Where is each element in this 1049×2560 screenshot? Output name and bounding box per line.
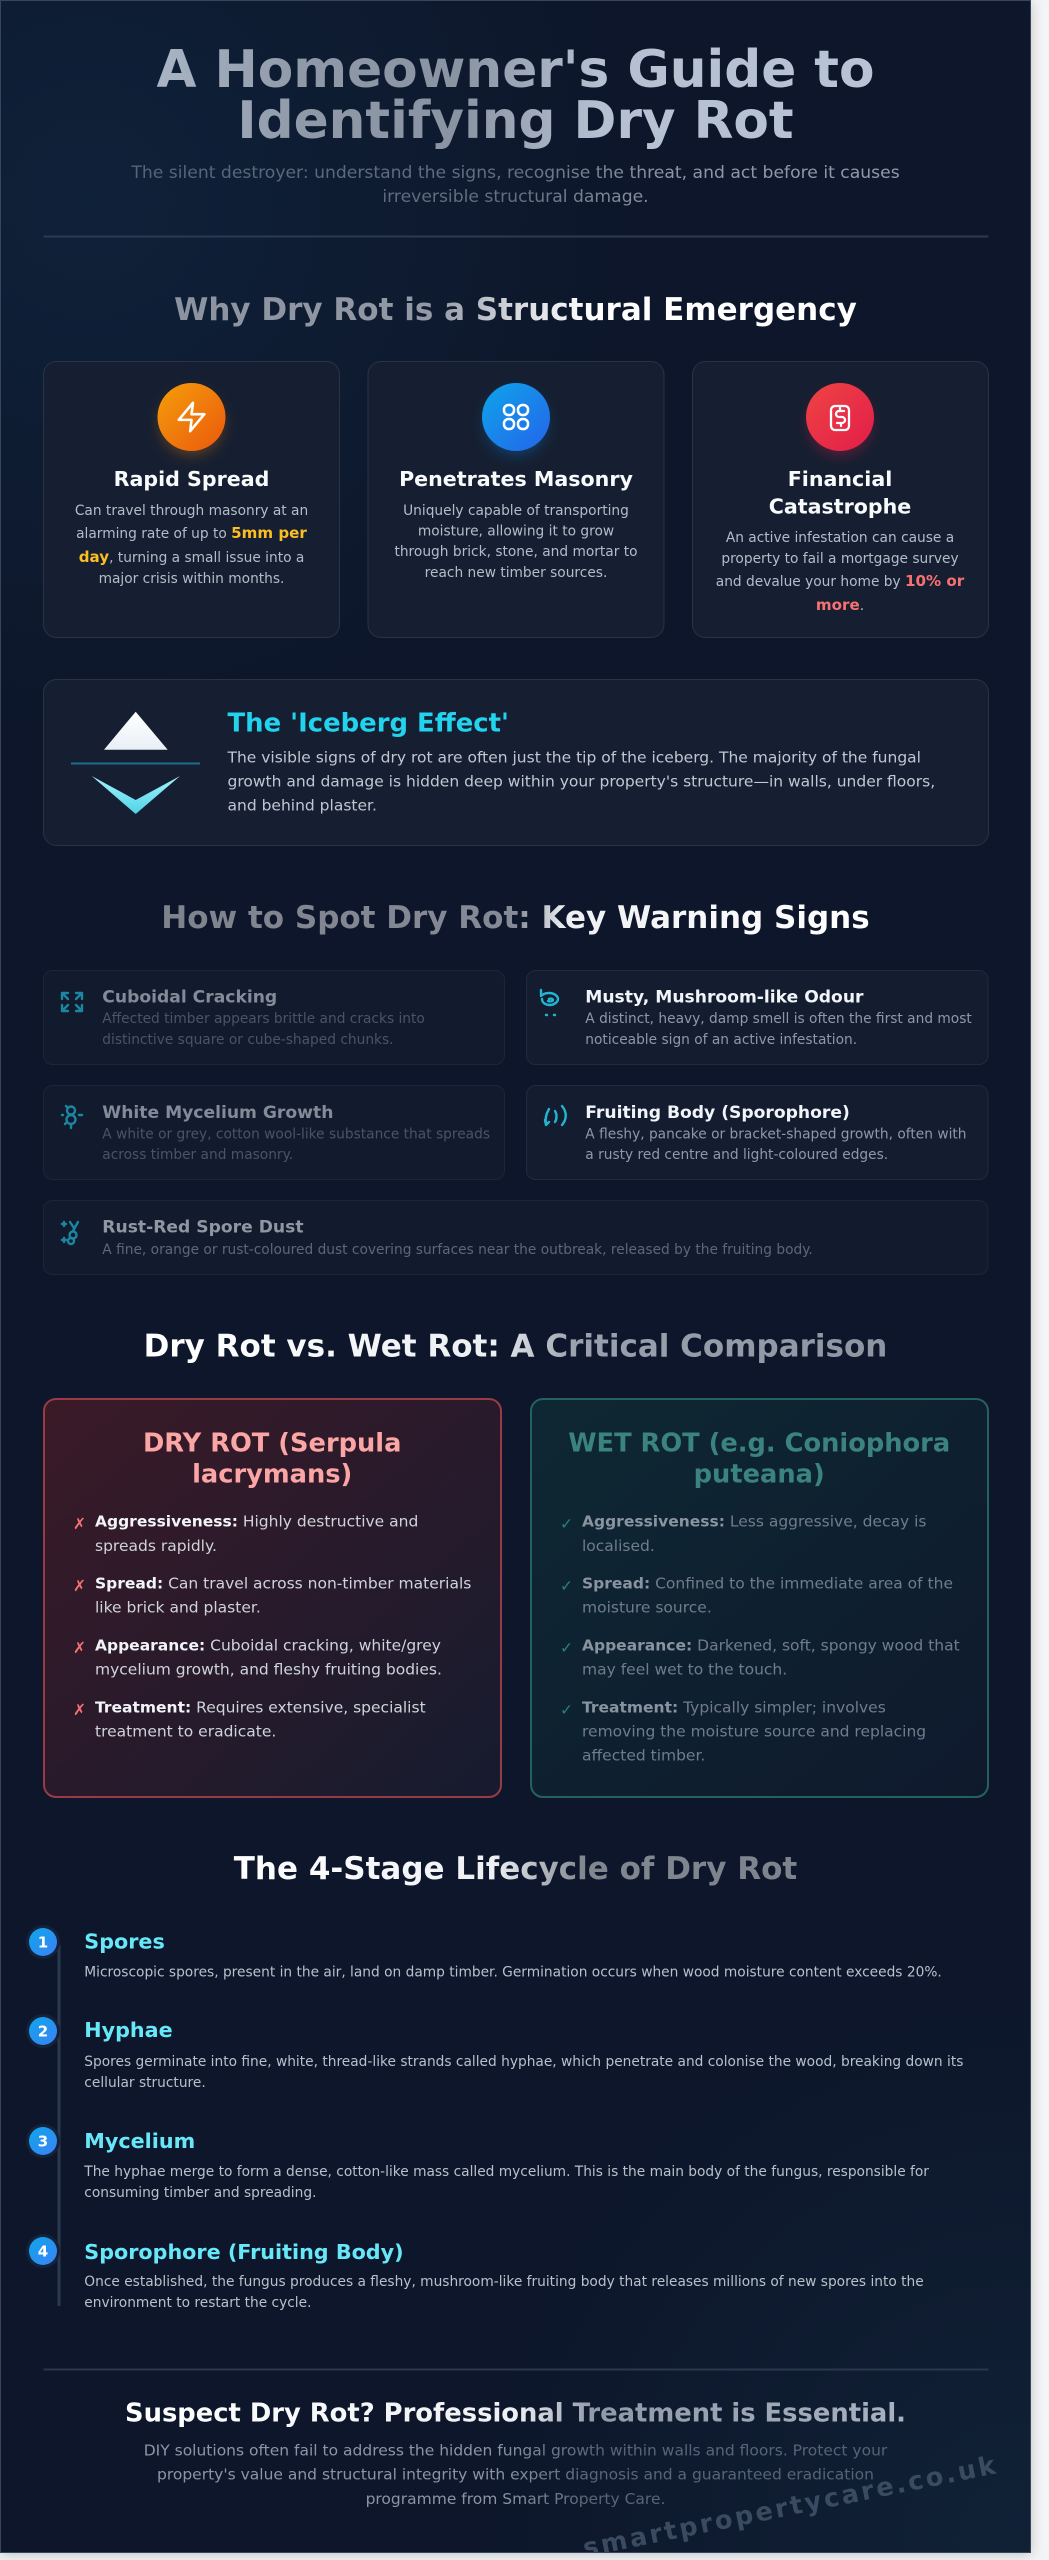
stage 4: sporophore — [26, 2234, 924, 2311]
stage 3: mycelium: consuming timber and spreading. — [84, 2185, 316, 2201]
header — [130, 40, 900, 207]
stage 4: sporophore: 4 — [38, 2242, 48, 2260]
stage 3: mycelium: The hyphae merge to form a dense, cotton-like mass called mycelium. This is the main body of the fungus, responsible for — [83, 2164, 929, 2180]
stage 4: sporophore: environment to restart the cycle. — [84, 2295, 311, 2311]
stage 3: mycelium: 3 — [38, 2132, 48, 2150]
wet rot list: ✓ — [560, 1639, 573, 1657]
wet rot list: ✓ — [560, 1701, 573, 1719]
sign text: A fine, orange or rust-coloured dust covering surfaces near the outbreak, released by the fruiting body. — [102, 1242, 813, 1258]
card text: major crisis within months. — [99, 571, 284, 587]
dry rot list: Appearance: Cuboidal cracking, white/grey — [95, 1637, 441, 1655]
icon: lightning bolt — [158, 383, 226, 455]
panel: dry rot — [44, 1399, 501, 1797]
wet rot list — [560, 1513, 960, 1765]
wet rot heading: puteana) — [694, 1459, 825, 1489]
dry rot list: ✗ — [73, 1701, 86, 1719]
sign text — [102, 1127, 490, 1163]
icon: spore dust — [62, 1222, 78, 1244]
card text: through brick, stone, and mortar to — [394, 544, 638, 560]
sign text — [585, 1127, 967, 1163]
stage 1: spores: Microscopic spores, present in the air, land on damp timber. Germination occurs when wood moisture content exceeds 20%. — [84, 1965, 942, 1981]
cta text: programme from Smart Property Care. — [366, 2490, 665, 2508]
sign text: A fleshy, pancake or bracket-shaped growth, often with — [585, 1127, 967, 1143]
title — [156, 40, 875, 151]
panel: rust-red spore dust — [44, 1200, 988, 1274]
stage 4: sporophore: Sporophore (Fruiting Body) — [84, 2240, 404, 2264]
iceberg text — [226, 749, 935, 815]
wet rot list: moisture source. — [582, 1599, 712, 1617]
subtitle: irreversible structural damage. — [382, 187, 649, 207]
wet rot list: Appearance: Darkened, soft, spongy wood that — [582, 1637, 960, 1655]
iceberg text: growth and damage is hidden deep within your property's structure—in walls, under floors, — [228, 773, 935, 791]
card text: alarming rate of up to 5mm per — [76, 524, 307, 542]
title: A Homeowner's Guide to — [156, 40, 875, 100]
wet rot heading — [568, 1429, 950, 1489]
icon: money — [806, 383, 874, 455]
icon: grid — [482, 383, 550, 455]
icon: mycelium — [62, 1106, 82, 1128]
card text: Uniquely capable of transporting — [403, 503, 629, 519]
sign text — [102, 1011, 425, 1048]
wet rot list: Aggressiveness: Less aggressive, decay is — [582, 1513, 926, 1531]
panel: fruiting body — [526, 1086, 988, 1180]
dry rot list: spreads rapidly. — [95, 1537, 217, 1555]
card text: more. — [816, 596, 864, 614]
sign text: Affected timber appears brittle and cracks into — [102, 1011, 425, 1027]
sign text: noticeable sign of an active infestation. — [585, 1032, 857, 1048]
card text: moisture, allowing it to grow — [418, 524, 614, 540]
sign text — [585, 1011, 972, 1048]
wet rot list: affected timber. — [582, 1747, 705, 1765]
card title: Penetrates Masonry — [399, 467, 634, 491]
panel: white mycelium — [44, 1086, 504, 1180]
sign text: a rusty red centre and light-coloured edges. — [585, 1147, 888, 1163]
wet rot list: ✓ — [560, 1515, 573, 1533]
stage 1: spores — [26, 1925, 942, 1981]
dry rot heading — [143, 1429, 401, 1489]
sign title: Cuboidal Cracking — [102, 988, 277, 1008]
wet rot list: localised. — [582, 1537, 655, 1555]
iceberg text: and behind plaster. — [228, 797, 377, 815]
card text — [394, 503, 638, 581]
iceberg text: The visible signs of dry rot are often just the tip of the iceberg. The majority of the fungal — [226, 749, 921, 767]
heading: lifecycle: The 4-Stage Lifecycle of Dry Rot — [234, 1851, 797, 1887]
wet rot list: may feel wet to the touch. — [582, 1661, 787, 1679]
dry rot list — [73, 1513, 471, 1741]
stage 3: mycelium: Mycelium — [84, 2129, 195, 2153]
stage 2: hyphae — [26, 2014, 963, 2091]
stage 1: spores: Spores — [84, 1929, 165, 1953]
dry rot heading: DRY ROT (Serpula — [143, 1429, 401, 1459]
card text: day, turning a small issue into a — [79, 548, 304, 566]
dry rot list: like brick and plaster. — [95, 1599, 261, 1617]
sign title: White Mycelium Growth — [102, 1103, 333, 1123]
card text: property to fail a mortgage survey — [721, 551, 959, 567]
call to action — [125, 2399, 906, 2508]
sign title: Fruiting Body (Sporophore) — [585, 1103, 850, 1123]
card title: Rapid Spread — [114, 467, 269, 491]
stage 2: hyphae: 2 — [38, 2022, 48, 2040]
sign title: Rust-Red Spore Dust — [102, 1218, 304, 1238]
wet rot list: Spread: Confined to the immediate area of the — [582, 1575, 953, 1593]
dry rot list: ✗ — [73, 1515, 86, 1533]
cta heading: Suspect Dry Rot? Professional Treatment is Essential. — [125, 2399, 906, 2429]
card title: Financial — [788, 467, 892, 491]
wet rot list: ✓ — [560, 1577, 573, 1595]
dry rot heading: lacrymans) — [192, 1459, 352, 1489]
lifecycle timeline — [26, 1925, 963, 2311]
heading: warning signs: How to Spot Dry Rot: Key Warning Signs — [161, 900, 870, 936]
wet rot list: Treatment: Typically simpler; involves — [582, 1699, 886, 1717]
card title: Catastrophe — [769, 494, 911, 518]
panel: penetrates masonry — [368, 362, 664, 638]
stage 2: hyphae: cellular structure. — [84, 2075, 206, 2091]
sign text: distinctive square or cube-shaped chunks. — [102, 1032, 394, 1048]
panel: iceberg effect — [44, 680, 988, 846]
icon: expand arrows — [62, 993, 82, 1011]
stage 3: mycelium — [26, 2124, 929, 2201]
sign text: A white or grey, cotton wool-like substance that spreads — [102, 1127, 490, 1143]
card text: An active infestation can cause a — [726, 530, 954, 546]
subtitle — [130, 163, 900, 207]
card text — [75, 503, 308, 587]
iceberg title: The 'Iceberg Effect' — [228, 708, 509, 738]
wet rot list: removing the moisture source and replacing — [582, 1723, 926, 1741]
dry rot list: ✗ — [73, 1577, 86, 1595]
dry rot list: mycelium growth, and fleshy fruiting bodies. — [95, 1661, 442, 1679]
icon: odour swirl — [541, 990, 558, 1015]
cta text: DIY solutions often fail to address the hidden fungal growth within walls and floors. Protect your — [144, 2442, 888, 2460]
icon: fruiting body — [545, 1106, 566, 1125]
dry rot list: Spread: Can travel across non-timber materials — [95, 1575, 471, 1593]
card title — [769, 467, 911, 518]
panel: cuboidal cracking — [44, 970, 504, 1064]
heading: why dry rot: Why Dry Rot is a Structural Emergency — [174, 292, 857, 328]
panel: rapid spread — [44, 362, 340, 638]
stage 2: hyphae: Spores germinate into fine, white, thread-like strands called hyphae, which penetrate and colonise the wood, breaking down its — [84, 2054, 963, 2070]
sign text: A distinct, heavy, damp smell is often the first and most — [585, 1011, 972, 1027]
card text: and devalue your home by 10% or — [716, 572, 965, 590]
heading: comparison: Dry Rot vs. Wet Rot: A Critical Comparison — [144, 1329, 887, 1365]
stage 4: sporophore: Once established, the fungus produces a fleshy, mushroom-like fruiting body that releases millions of new spores into the — [84, 2274, 924, 2290]
panel: musty odour — [526, 970, 988, 1064]
icon: iceberg — [71, 712, 200, 814]
panel: financial catastrophe — [692, 362, 988, 638]
cta text — [144, 2442, 888, 2508]
stage 2: hyphae: Hyphae — [84, 2018, 173, 2042]
card text: Can travel through masonry at an — [75, 503, 308, 519]
sign title: Musty, Mushroom-like Odour — [585, 988, 864, 1008]
card text: reach new timber sources. — [425, 565, 607, 581]
dry rot list: ✗ — [73, 1639, 86, 1657]
wet rot heading: WET ROT (e.g. Coniophora — [568, 1429, 950, 1459]
dry rot list: Treatment: Requires extensive, specialist — [95, 1699, 426, 1717]
panel: wet rot — [531, 1399, 988, 1797]
stage 1: spores: 1 — [38, 1934, 48, 1952]
dry rot list: treatment to eradicate. — [95, 1723, 276, 1741]
title: Identifying Dry Rot — [237, 91, 794, 151]
card text — [716, 530, 965, 614]
cta text: property's value and structural integrity with expert diagnosis and a guaranteed eradication — [157, 2466, 874, 2484]
subtitle: The silent destroyer: understand the signs, recognise the threat, and act before it causes — [130, 163, 900, 183]
sign text: across timber and masonry. — [102, 1147, 293, 1163]
dry rot list: Aggressiveness: Highly destructive and — [95, 1513, 418, 1531]
